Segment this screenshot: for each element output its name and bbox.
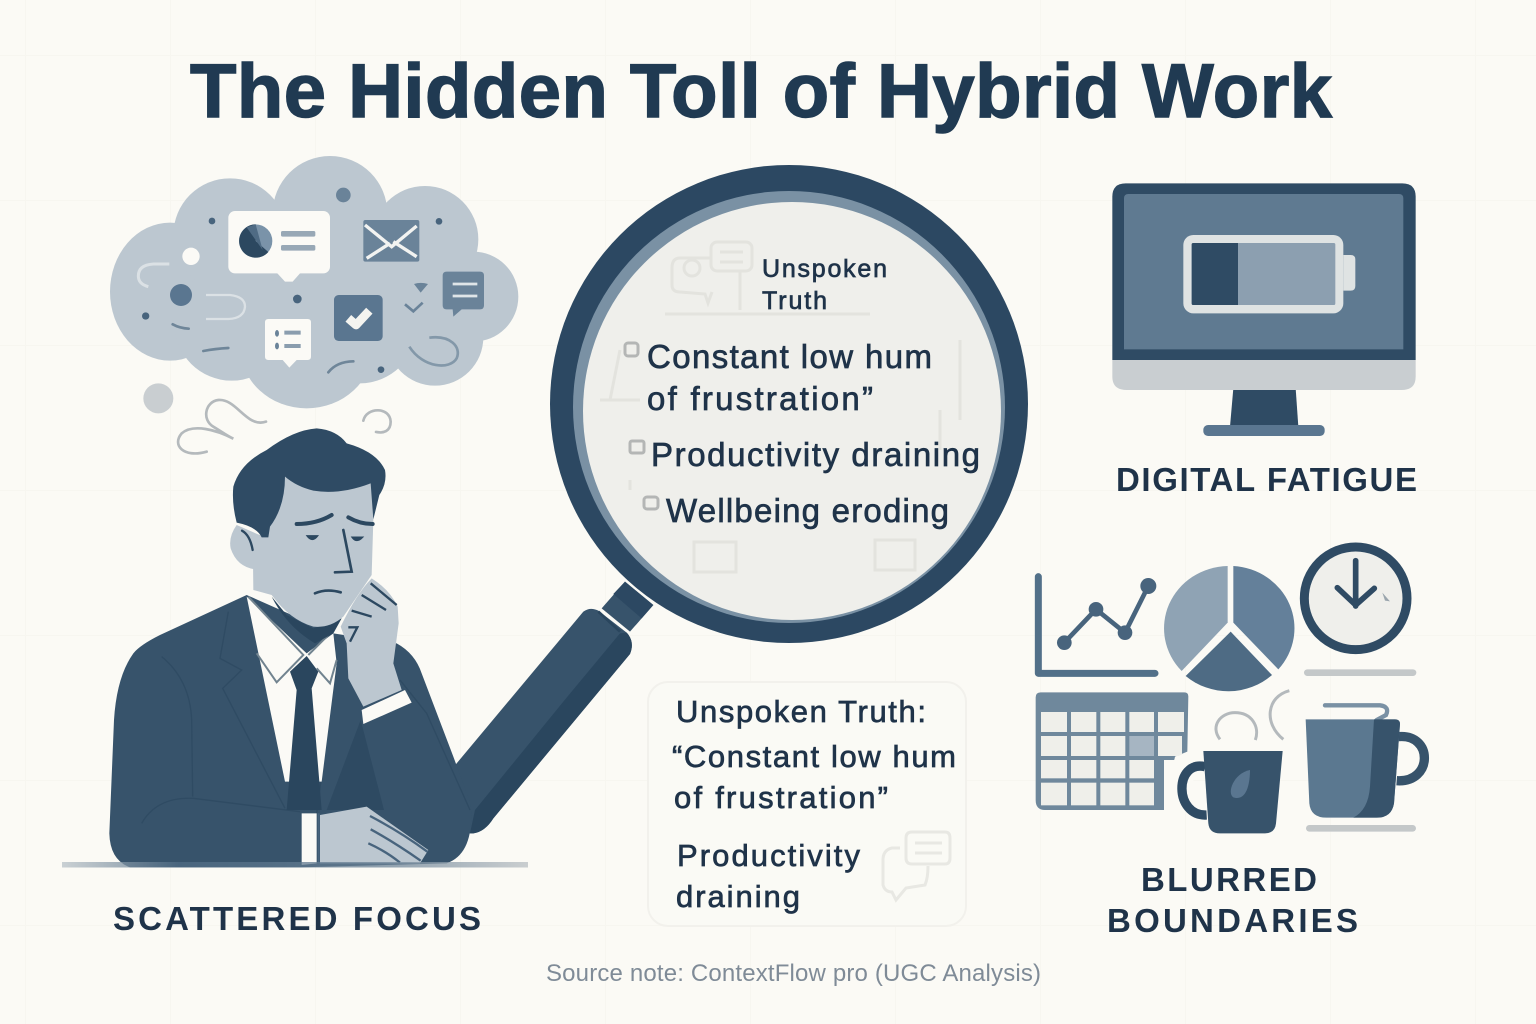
monitor chin xyxy=(1112,360,1416,390)
label: blurred boundaries: BLURRED xyxy=(1141,861,1317,898)
icon: check box xyxy=(334,295,383,341)
steam xyxy=(1216,691,1289,740)
squiggles xyxy=(178,400,391,453)
grip xyxy=(450,609,632,833)
resting hand xyxy=(302,807,428,865)
grip shadow xyxy=(470,633,632,833)
cuff xyxy=(302,813,317,865)
icon: faint chat bubbles xyxy=(883,832,950,900)
callout text xyxy=(672,694,956,914)
shirt xyxy=(247,597,337,782)
ear xyxy=(230,525,263,569)
highlighted day xyxy=(1129,736,1154,756)
callout text: Unspoken Truth: xyxy=(676,694,926,729)
callout text: Productivity xyxy=(677,838,860,873)
label: digital fatigue: DIGITAL FATIGUE xyxy=(1116,461,1417,498)
jacket shadow xyxy=(327,720,384,810)
label: scattered focus: SCATTERED FOCUS xyxy=(113,900,481,937)
lens bullet list: Constant low hum xyxy=(647,338,932,375)
cloud shape xyxy=(110,156,518,408)
lens heading: Truth xyxy=(762,287,827,315)
title: The Hidden Toll of Hybrid Work xyxy=(190,49,1333,134)
magnifying glass xyxy=(550,165,1028,643)
small shapes in cloud xyxy=(138,188,458,373)
cuff xyxy=(362,690,412,724)
source note: Source note: ContextFlow pro (UGC Analysis) xyxy=(546,960,1041,987)
lens heading xyxy=(762,255,887,315)
icon: chat bubble xyxy=(443,272,484,317)
icon: pie chat bubble xyxy=(228,211,330,282)
clock xyxy=(1304,547,1407,650)
screen xyxy=(1124,194,1403,349)
label: blurred boundaries: BOUNDARIES xyxy=(1107,902,1358,939)
lens text xyxy=(625,255,980,529)
monitor bezel xyxy=(1112,183,1416,360)
label: blurred boundaries xyxy=(1107,861,1358,939)
lens heading: Unspoken xyxy=(762,255,887,283)
callout text: of frustration” xyxy=(674,780,888,815)
hair xyxy=(233,428,386,537)
lens bullet list xyxy=(625,338,980,529)
faint sketches in lens xyxy=(600,242,960,572)
lens xyxy=(583,202,1001,620)
mug shelf xyxy=(1306,825,1416,832)
man xyxy=(109,428,471,867)
rim xyxy=(550,165,1028,643)
lens bullet list: Productivity draining xyxy=(651,436,980,473)
icon group: work items xyxy=(1036,547,1424,833)
suit seams xyxy=(142,612,470,823)
icon: list bubble xyxy=(265,319,311,368)
callout: unspoken truth box xyxy=(648,682,966,926)
collar xyxy=(248,597,337,683)
magnifying glass handle xyxy=(450,582,653,833)
line chart xyxy=(1038,577,1156,673)
suit xyxy=(109,595,471,867)
lens bullet list: Wellbeing eroding xyxy=(666,492,949,529)
dark mug xyxy=(1182,751,1283,833)
neck xyxy=(602,582,653,632)
calendar xyxy=(1036,692,1193,812)
pie chart xyxy=(1164,566,1294,691)
neck band xyxy=(613,582,653,618)
lens bullet list: of frustration” xyxy=(647,380,873,417)
raised hand xyxy=(341,578,412,724)
face xyxy=(253,477,373,627)
facial features xyxy=(242,515,373,593)
clock shelf xyxy=(1304,669,1416,676)
inner rim xyxy=(573,191,1005,623)
battery xyxy=(1183,235,1355,313)
tie xyxy=(287,656,322,810)
blue mug xyxy=(1306,719,1424,818)
small thought circle xyxy=(143,383,173,413)
icon: monitor with low battery xyxy=(1112,183,1416,436)
thought cloud xyxy=(110,156,518,453)
callout text: “Constant low hum xyxy=(672,739,956,774)
callout text: draining xyxy=(676,879,800,914)
icon: envelope xyxy=(363,220,419,262)
desk line xyxy=(62,862,528,868)
steam hook xyxy=(1325,705,1387,720)
stand xyxy=(1230,388,1298,427)
grip seam xyxy=(598,612,620,632)
neck shadow xyxy=(272,597,342,643)
